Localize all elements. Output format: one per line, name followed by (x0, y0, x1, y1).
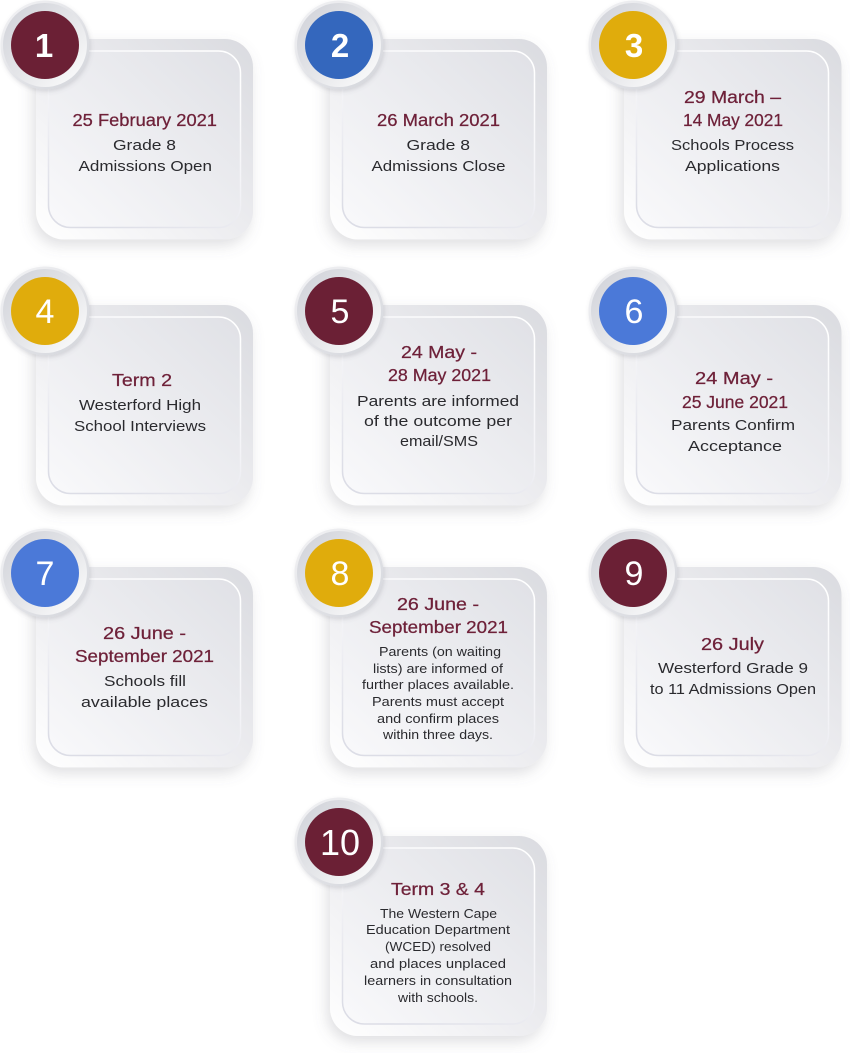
text 2: 26 March 2021 (377, 110, 500, 130)
inner panel 8 (342, 579, 534, 756)
text 10: Education Department (366, 922, 510, 937)
badge 7: 7 (36, 555, 54, 593)
panel 6 (624, 305, 842, 506)
badge 8 (294, 528, 384, 618)
panel 8 (330, 567, 547, 768)
text 8: 26 June - (397, 594, 479, 614)
text 4: Term 2 (112, 370, 172, 390)
card 4 (0, 266, 253, 506)
text 8: lists) are informed of (373, 661, 503, 676)
badge 1: 1 (35, 27, 53, 64)
text 1: Grade 8 (113, 137, 176, 154)
badge 6 (588, 266, 678, 356)
text 9: 26 July (701, 634, 764, 654)
text 8: Parents (on waiting (379, 644, 501, 659)
badge 8: 8 (331, 555, 349, 593)
text 3 (671, 87, 794, 175)
text 1: Admissions Open (78, 158, 212, 175)
card 5 (294, 266, 547, 506)
card 10 (294, 798, 547, 1036)
text 3: 29 March – (684, 87, 781, 107)
card 3 (588, 0, 842, 240)
text 8: Parents must accept (372, 694, 504, 709)
text 9: to 11 Admissions Open (650, 681, 816, 698)
panel 5 (330, 305, 547, 506)
card 2 (294, 0, 547, 240)
badge 3 (588, 0, 678, 90)
text 10 (364, 879, 512, 1005)
text 2 (372, 110, 506, 175)
text 3: 14 May 2021 (683, 110, 783, 130)
text 3: Schools Process (671, 137, 794, 154)
card 6 (588, 266, 842, 506)
inner panel 5 (342, 317, 534, 494)
badge 1 (0, 0, 90, 90)
text 9 (650, 634, 816, 698)
panel 1 (36, 39, 253, 240)
text 10: and places unplaced (370, 956, 506, 971)
badge 4: 4 (36, 293, 54, 331)
badge 10 (294, 798, 384, 886)
text 7: September 2021 (75, 646, 214, 666)
text 10: The Western Cape (380, 906, 497, 921)
text 4 (74, 370, 206, 435)
text 9: Westerford Grade 9 (658, 660, 808, 677)
text 8: further places available. (362, 677, 514, 692)
inner panel 10 (342, 848, 534, 1024)
panel 10 (330, 836, 547, 1036)
text 2: Admissions Close (372, 158, 506, 175)
inner panel 9 (636, 579, 828, 756)
text 5: email/SMS (400, 433, 478, 450)
badge 7 (0, 528, 90, 618)
card 9 (588, 528, 842, 768)
text 5: of the outcome per (364, 413, 512, 430)
text 6: Acceptance (688, 438, 782, 455)
text 6: 25 June 2021 (682, 392, 788, 412)
text 7 (75, 623, 214, 711)
badge 9: 9 (625, 555, 643, 593)
badge 5: 5 (331, 293, 349, 331)
text 1 (72, 110, 217, 175)
card 8 (294, 528, 547, 768)
inner panel 4 (48, 317, 240, 494)
text 7: available places (81, 694, 208, 711)
text 10: learners in consultation (364, 973, 512, 988)
inner panel 1 (48, 51, 240, 228)
badge 9 (588, 528, 678, 618)
text 10: (WCED) resolved (385, 939, 491, 954)
inner panel 7 (48, 579, 240, 756)
inner panel 3 (636, 51, 828, 228)
badge 2: 2 (331, 27, 349, 64)
panel 4 (36, 305, 253, 506)
text 8: within three days. (382, 727, 493, 742)
badge 4 (0, 266, 90, 356)
badge 2 (294, 0, 384, 90)
text 4: School Interviews (74, 418, 206, 435)
badge 10: 10 (320, 822, 360, 863)
panel 7 (36, 567, 253, 768)
text 10: Term 3 & 4 (391, 879, 485, 899)
panel 3 (624, 39, 842, 240)
text 1: 25 February 2021 (72, 110, 217, 130)
text 3: Applications (685, 158, 780, 175)
card 1 (0, 0, 253, 240)
badge 6: 6 (625, 293, 643, 331)
text 5: Parents are informed (357, 393, 519, 410)
panel 9 (624, 567, 842, 768)
panel 2 (330, 39, 547, 240)
text 8: September 2021 (369, 617, 508, 637)
inner panel 2 (342, 51, 534, 228)
text 8 (362, 594, 514, 742)
text 2: Grade 8 (406, 137, 470, 154)
inner panel 6 (636, 317, 828, 494)
text 7: Schools fill (104, 673, 186, 690)
card 7 (0, 528, 253, 768)
text 6 (671, 368, 795, 455)
text 5 (357, 342, 519, 450)
text 8: and confirm places (377, 711, 499, 726)
badge 3: 3 (625, 27, 643, 64)
text 7: 26 June - (103, 623, 186, 643)
text 5: 24 May - (401, 342, 477, 362)
text 4: Westerford High (79, 397, 201, 414)
text 10: with schools. (397, 990, 478, 1005)
text 5: 28 May 2021 (388, 365, 491, 385)
text 6: 24 May - (695, 368, 773, 388)
text 6: Parents Confirm (671, 417, 795, 434)
badge 5 (294, 266, 384, 356)
